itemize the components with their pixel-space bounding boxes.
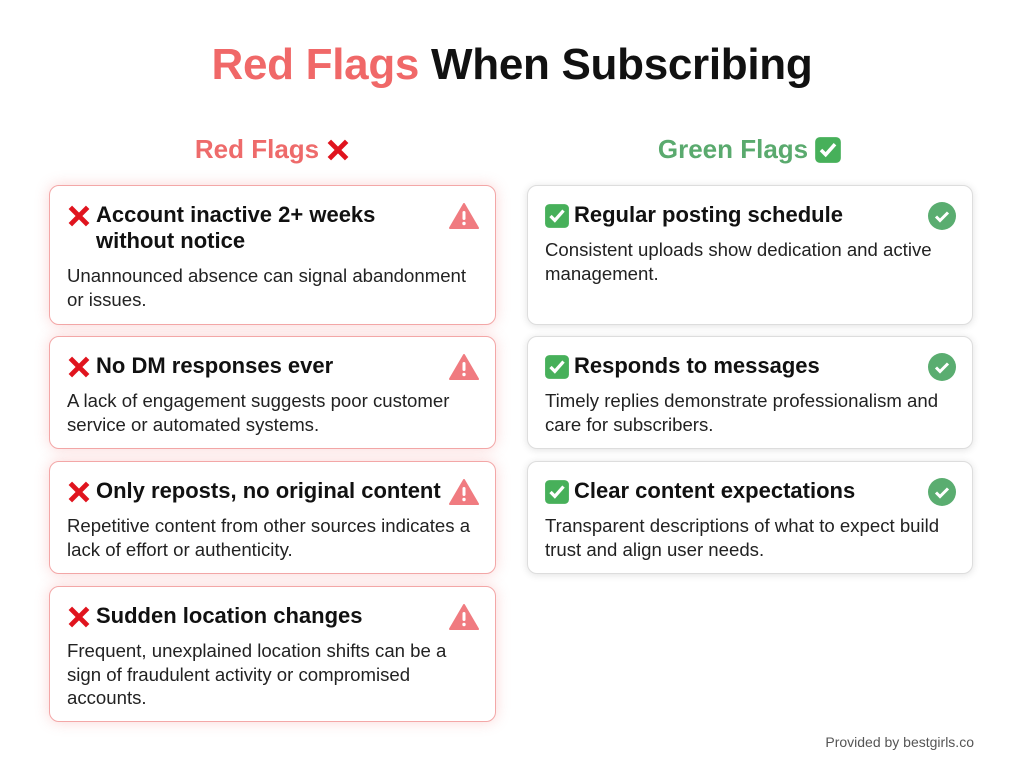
panel: green card 3 bbox=[527, 461, 973, 574]
icon: check circle bbox=[928, 478, 956, 506]
footer credit: Provided by bestgirls.co bbox=[825, 734, 974, 750]
card title: Responds to messages bbox=[574, 353, 820, 378]
card body bbox=[67, 265, 466, 310]
icon: warning bbox=[449, 604, 479, 630]
heading: green flags: Green Flags bbox=[658, 134, 808, 164]
card title: No DM responses ever bbox=[96, 353, 333, 378]
icon: warning bbox=[449, 203, 479, 229]
card title: without notice bbox=[96, 228, 245, 253]
title: Red Flags When Subscribing bbox=[212, 40, 812, 89]
card body: Timely replies demonstrate professionalism and care for subscribers. bbox=[545, 390, 938, 434]
icon: check circle bbox=[928, 202, 956, 230]
heading: red flags: Red Flags bbox=[195, 134, 319, 164]
panel: red card 1 bbox=[49, 185, 496, 325]
card body: A lack of engagement suggests poor customer service or automated systems. bbox=[67, 390, 449, 434]
card title bbox=[68, 202, 375, 253]
card title: Clear content expectations bbox=[574, 478, 855, 503]
panel: green card 2 bbox=[527, 336, 973, 449]
card body: Repetitive content from other sources indicates a lack of effort or authenticity. bbox=[67, 515, 470, 560]
card body: or issues. bbox=[67, 288, 147, 310]
card title: Only reposts, no original content bbox=[96, 478, 441, 503]
card body: Unannounced absence can signal abandonment bbox=[67, 265, 466, 286]
panel: red card 2 bbox=[49, 336, 496, 449]
panel: green card 1 bbox=[527, 185, 973, 325]
icon: warning bbox=[449, 354, 479, 380]
icon: warning bbox=[449, 479, 479, 505]
card title: Account inactive 2+ weeks bbox=[96, 202, 375, 227]
card body: Transparent descriptions of what to expect build trust and align user needs. bbox=[545, 515, 939, 560]
icon: check circle bbox=[928, 353, 956, 381]
card title: Regular posting schedule bbox=[574, 202, 843, 227]
card title: Sudden location changes bbox=[96, 603, 362, 628]
panel: red card 3 bbox=[49, 461, 496, 574]
card body: Consistent uploads show dedication and active management. bbox=[545, 239, 932, 284]
panel: red card 4 bbox=[49, 586, 496, 722]
card body: Frequent, unexplained location shifts can be a sign of fraudulent activity or compromised accounts. bbox=[67, 640, 446, 708]
